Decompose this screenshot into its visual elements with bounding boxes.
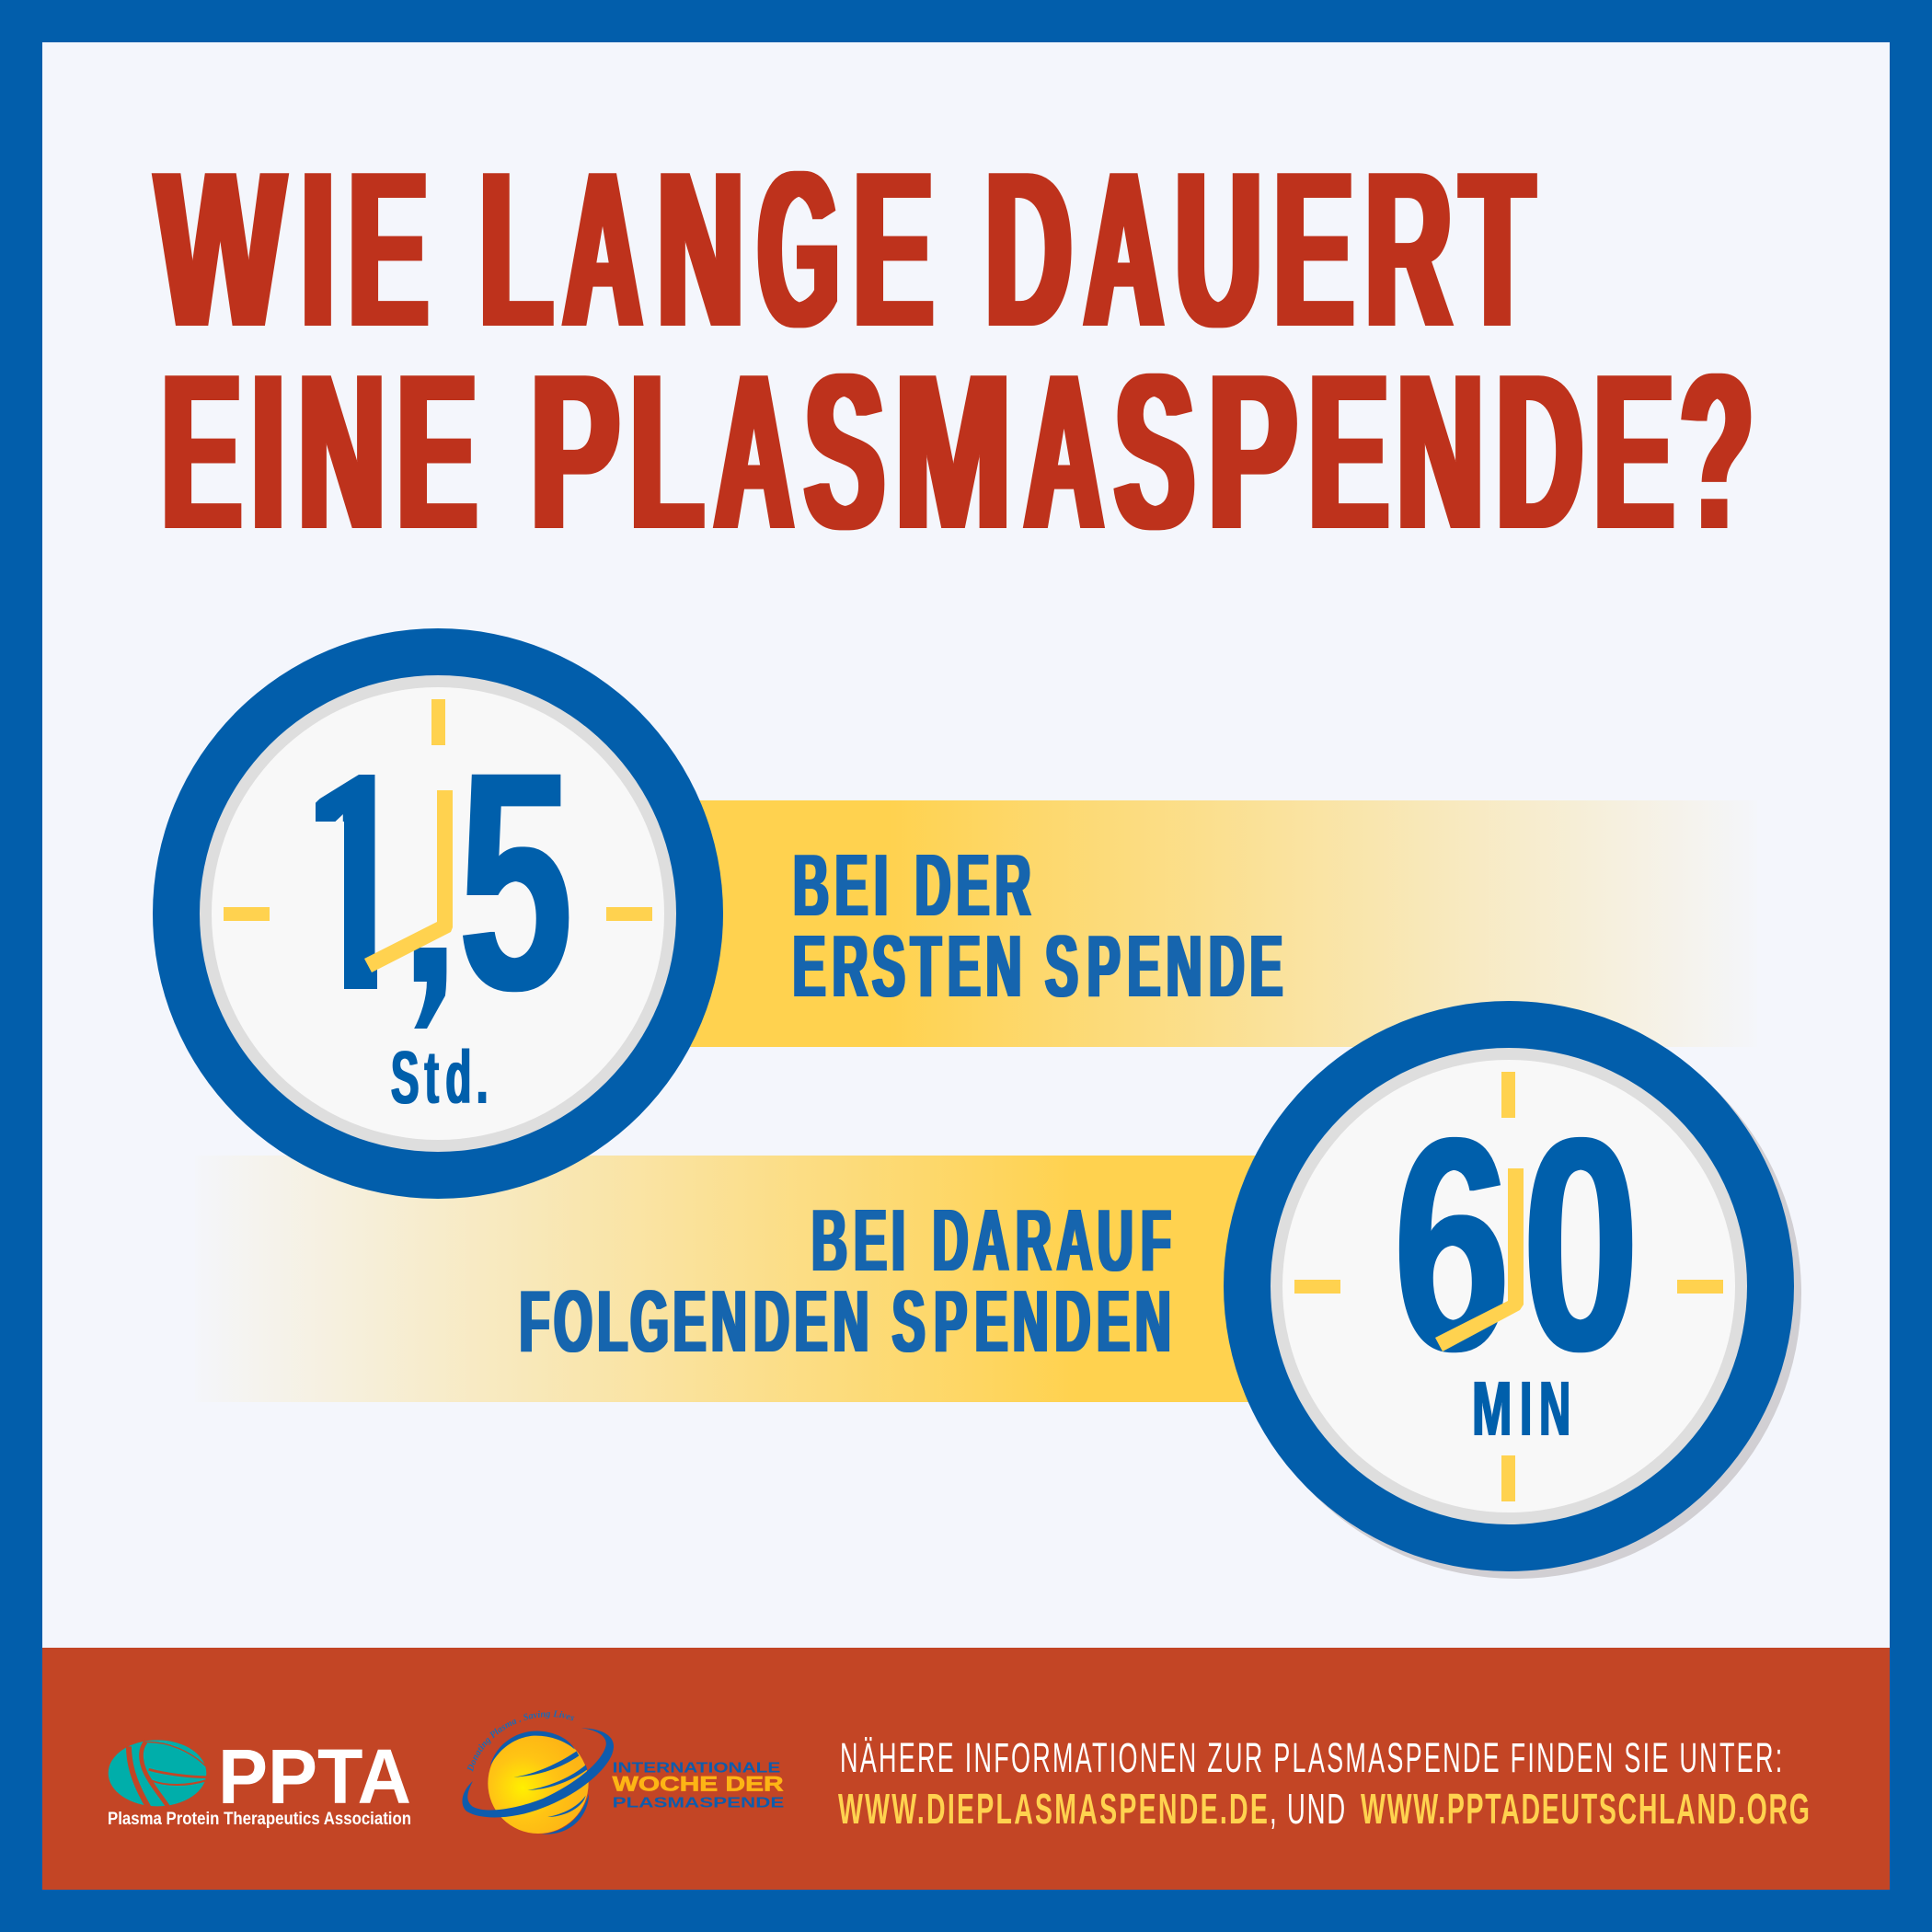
band text: following donations: BEI DARAUF <box>811 1192 1171 1290</box>
band text: first donation: BEI DER <box>793 837 1030 935</box>
logo wordmark: INTERNATIONALE <box>613 1761 781 1777</box>
unit MIN: MIN <box>1472 1366 1570 1453</box>
band text: following donations <box>520 1192 1171 1371</box>
logo wordmark: WOCHE DER <box>613 1773 784 1796</box>
footer link 2: WWW.PPTADEUTSCHLAND.ORG <box>1361 1786 1810 1834</box>
footer line 1: NÄHERE INFORMATIONEN ZUR PLASMASPENDE FINDEN SIE UNTER: <box>840 1734 1782 1781</box>
band text: first donation: ERSTEN SPENDE <box>793 918 1282 1016</box>
number 60: 60 <box>1394 1075 1639 1415</box>
title line 1: WIE LANGE DAUERT <box>156 126 1534 374</box>
clock ticks <box>224 699 652 921</box>
curved slogan: Donating Plasma . Saving Lives <box>467 1710 574 1772</box>
band text: following donations: FOLGENDEN SPENDEN <box>520 1273 1171 1371</box>
content panel <box>42 42 1890 1648</box>
logo wordmark <box>613 1761 785 1811</box>
band: first donation <box>644 800 1757 1047</box>
title <box>156 126 1754 576</box>
footer link 1: WWW.DIEPLASMASPENDE.DE <box>838 1786 1268 1834</box>
footer text <box>838 1734 1810 1834</box>
clock ticks <box>1294 1072 1723 1501</box>
logo wordmark: PLASMASPENDE <box>613 1795 785 1811</box>
logo: PPTA <box>108 1733 411 1829</box>
PPTA wordmark: PPTA <box>218 1733 411 1820</box>
footer connector: , UND <box>1270 1787 1345 1834</box>
unit Std.: Std. <box>391 1036 489 1121</box>
clock hands <box>364 790 453 972</box>
clock: 1,5 Std. <box>153 628 723 1199</box>
footer band <box>42 1648 1890 1890</box>
PPTA full name: Plasma Protein Therapeutics Association <box>108 1810 411 1829</box>
title line 2: EINE PLASMASPENDE? <box>162 328 1754 576</box>
logo: International Plasma Awareness Week <box>462 1710 785 1834</box>
clock: 60 MIN <box>1224 1001 1801 1579</box>
band: following donations <box>195 1156 1299 1402</box>
icon: globe <box>462 1728 614 1834</box>
icon: PPTA ellipse <box>109 1740 207 1808</box>
clock hands <box>1435 1168 1524 1351</box>
number 1,5: 1,5 <box>297 699 573 1055</box>
band text: first donation <box>793 837 1282 1016</box>
